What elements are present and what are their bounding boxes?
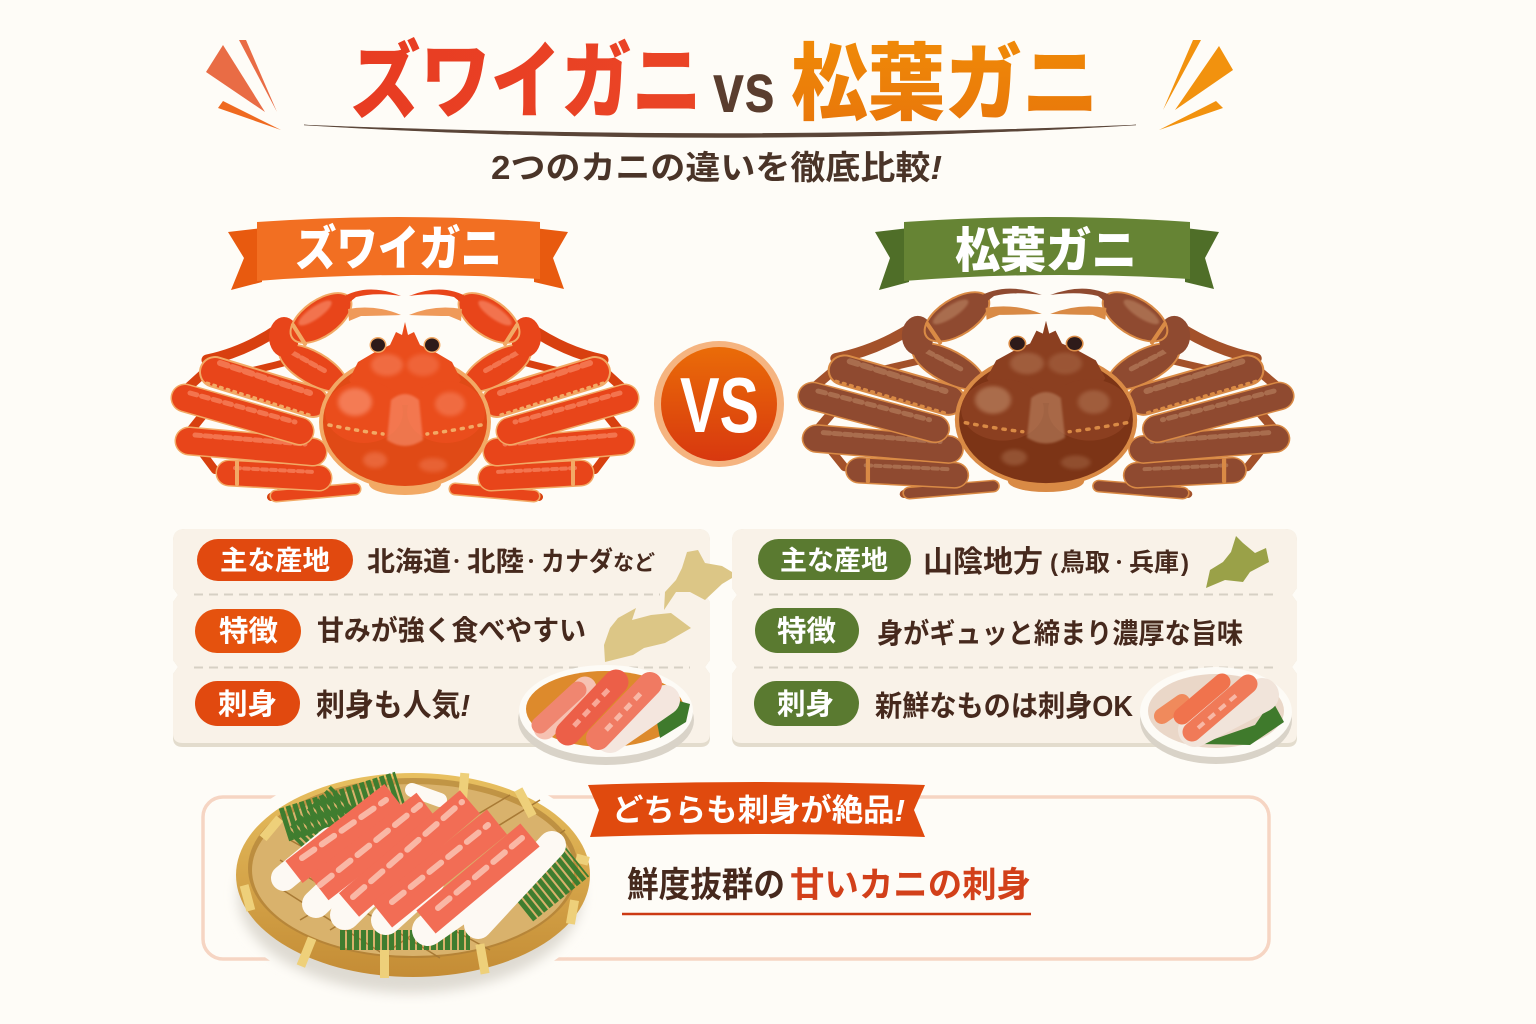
banner: zuwaigani: ズワイガニ: [295, 222, 502, 276]
row: origin: など: [613, 552, 655, 575]
rice under crab: [284, 790, 552, 930]
row: origin: ): [1181, 550, 1189, 577]
row: sashimi: [195, 681, 470, 726]
row: sashimi: [754, 681, 1133, 726]
row: feature: 身がギュッと締まり濃厚な旨味: [877, 617, 1243, 649]
row: origin: 山陰地方: [923, 546, 1043, 579]
title underline: [304, 125, 1136, 138]
tray bindings: [240, 773, 590, 978]
row: origin: 主な産地: [220, 546, 330, 576]
headline: [622, 866, 1031, 914]
panel: zuwaigani facts: [173, 529, 737, 765]
vs badge: VS: [680, 361, 759, 449]
map: japan: [604, 550, 737, 662]
headline: 鮮度抜群の: [627, 866, 785, 905]
callout frame: [203, 797, 1269, 959]
row: origin: 兵庫: [1129, 549, 1179, 577]
panel: matsubagani facts: [732, 529, 1297, 764]
row: sashimi: 刺身: [218, 688, 277, 721]
title: matsubagani: 松葉ガニ: [791, 37, 1099, 131]
map: hokkaido: [1206, 536, 1269, 588]
plate: matsubagani sashimi: [1140, 667, 1292, 764]
row: feature: 特徴: [777, 615, 836, 648]
crab meat: [294, 795, 530, 922]
tray halo: [220, 760, 604, 1000]
subtitle: 2つのカニの違いを徹底比較 !: [491, 149, 942, 186]
row: feature: 甘みが強く食べやすい: [317, 614, 586, 646]
plate: zuwaigani sashimi: [518, 665, 694, 765]
title: zuwaigani: ズワイガニ: [350, 35, 702, 129]
row: origin: 主な産地: [780, 546, 888, 576]
crab: zuwaigani: [183, 282, 627, 497]
row: origin: [197, 539, 655, 581]
panel: sashimi callout: [203, 760, 1269, 1000]
crab: matsubagani: [811, 281, 1281, 494]
burst left: [206, 40, 281, 130]
row: sashimi: 新鮮なものは刺身OK: [875, 690, 1133, 723]
sashimi tray: [236, 773, 590, 993]
row: origin: カナダ: [541, 546, 613, 577]
headline: 甘いカニの刺身: [790, 866, 1031, 905]
title: vs: vs: [713, 49, 775, 127]
row: origin: 北陸: [467, 547, 524, 577]
vs badge: [654, 341, 784, 467]
shiso leaves: [284, 788, 576, 940]
ribbon: どちらも刺身が絶品!: [612, 793, 905, 828]
row: origin: [758, 539, 1189, 580]
row: sashimi: 刺身も人気!: [316, 688, 470, 723]
banner: matsubagani: 松葉ガニ: [955, 225, 1137, 278]
row: feature: 特徴: [219, 615, 278, 648]
row: origin: (: [1050, 550, 1058, 577]
row: feature: [755, 608, 1243, 653]
row: origin: 鳥取: [1060, 549, 1110, 577]
burst right: [1159, 40, 1233, 130]
banner: matsubagani: [875, 217, 1219, 290]
ribbon: [588, 782, 925, 837]
row: sashimi: 刺身: [777, 688, 834, 721]
title: [206, 35, 1233, 186]
banner: zuwaigani: [228, 217, 568, 290]
row: origin: 北海道: [367, 547, 451, 577]
row: feature: [195, 609, 586, 653]
